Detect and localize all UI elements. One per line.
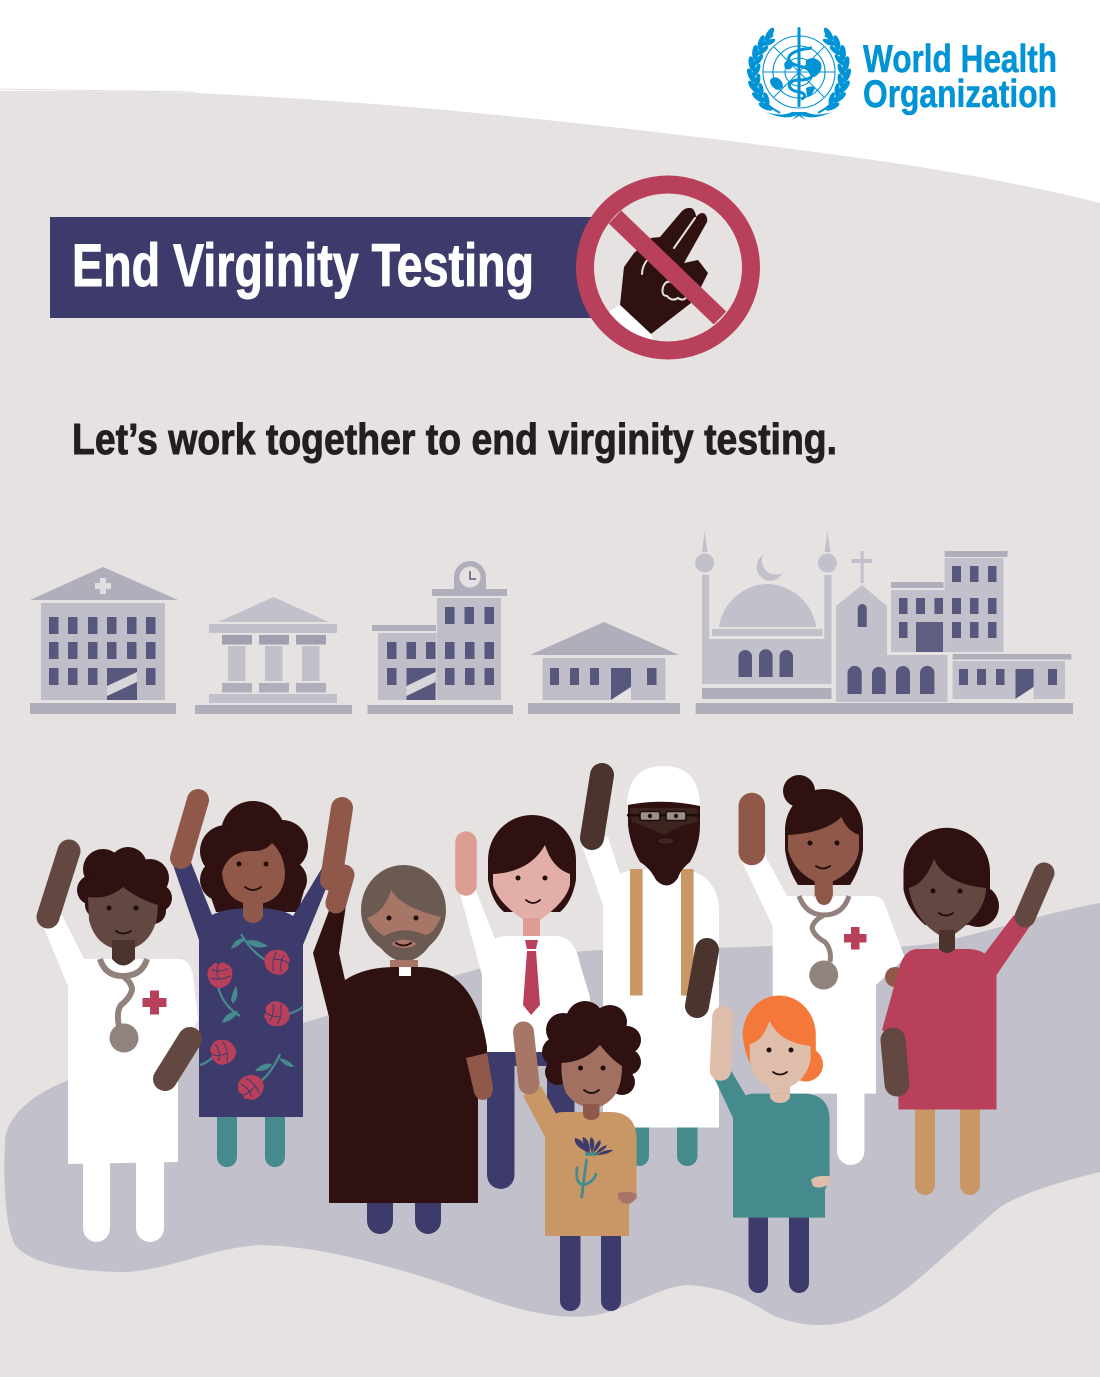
low building bbox=[953, 654, 1071, 699]
icon: WHO emblem bbox=[745, 26, 853, 120]
background blob bbox=[4, 903, 1100, 1325]
office block bbox=[891, 551, 1008, 652]
illustration: community house bbox=[528, 622, 680, 714]
organization name: World Health bbox=[863, 38, 1057, 81]
subtitle: Let’s work together to end virginity testing. bbox=[72, 415, 837, 464]
title banner bbox=[50, 217, 595, 318]
icon: prohibition sign over hand bbox=[585, 184, 751, 350]
illustration: bank building bbox=[195, 597, 352, 714]
person: child in tan shirt bbox=[523, 1001, 641, 1311]
title banner: End Virginity Testing bbox=[72, 232, 534, 299]
organization name bbox=[863, 38, 1057, 116]
illustration: school with clock tower bbox=[368, 561, 513, 714]
illustration: hospital building bbox=[30, 567, 178, 714]
organization name: Organization bbox=[863, 73, 1057, 116]
church bbox=[836, 551, 948, 702]
icon: shirt flower bbox=[575, 1137, 613, 1197]
person: imam bbox=[580, 766, 719, 1166]
illustration: town with mosque and church bbox=[695, 531, 1073, 714]
person: woman in red dress bbox=[882, 828, 1044, 1195]
person: doctor on the left bbox=[40, 847, 198, 1242]
hand bbox=[620, 208, 708, 334]
mosque bbox=[695, 531, 837, 699]
WHO logo bbox=[745, 26, 1057, 120]
person: priest bbox=[313, 865, 493, 1234]
person: child in teal shirt bbox=[713, 995, 830, 1293]
person: woman in floral dress bbox=[173, 800, 342, 1167]
person: doctor with bun bbox=[741, 775, 905, 1165]
dress rose pattern bbox=[200, 934, 303, 1104]
person: man with red tie bbox=[460, 815, 592, 1189]
